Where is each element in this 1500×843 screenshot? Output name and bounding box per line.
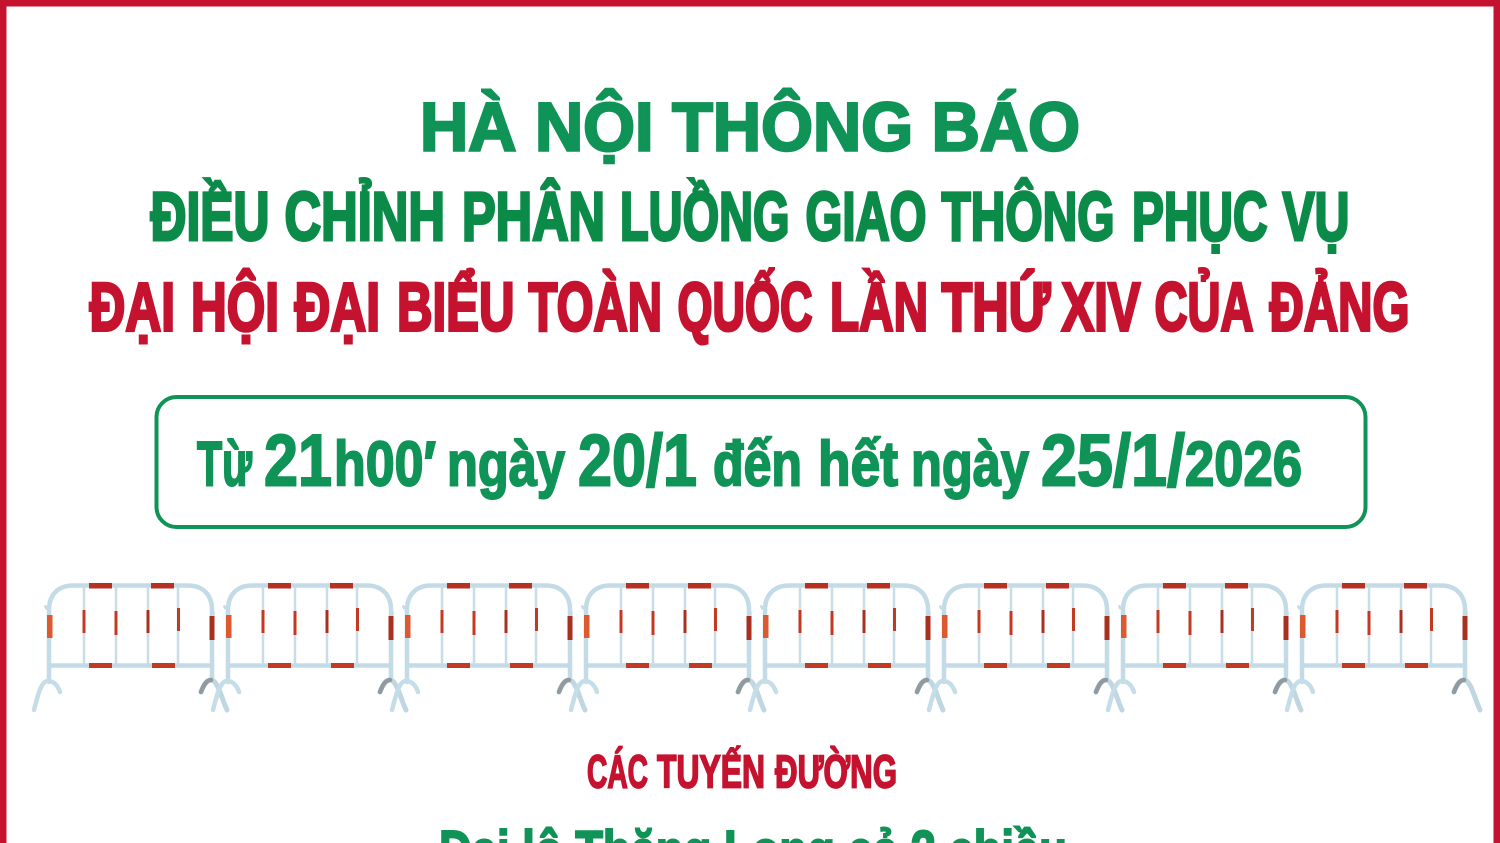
subtitle: traffic adjustment <box>150 178 1350 255</box>
subtitle: traffic adjustment: PHÂN <box>462 178 605 255</box>
barrier row <box>34 583 1480 710</box>
subtitle: party congress: CỦA <box>1154 268 1254 346</box>
subtitle: party congress: ĐẠI <box>294 268 380 346</box>
subtitle: traffic adjustment: PHỤC <box>1132 178 1268 255</box>
subtitle: traffic adjustment: ĐIỀU <box>150 178 270 255</box>
date text: ngày <box>911 430 1029 500</box>
section heading: routes: CÁC <box>587 746 648 798</box>
date text <box>197 420 1302 502</box>
date text: h00′ <box>334 430 436 500</box>
subtitle: party congress: LẦN <box>830 268 928 346</box>
subtitle: party congress: BIỂU <box>397 268 514 346</box>
subtitle: party congress <box>90 268 1410 346</box>
date text: 20/1 <box>578 420 697 502</box>
subtitle: traffic adjustment: VỤ <box>1282 178 1350 255</box>
section heading: routes: ĐƯỜNG <box>775 746 897 798</box>
subtitle: traffic adjustment: CHỈNH <box>284 178 445 255</box>
subtitle: traffic adjustment: GIAO <box>806 178 926 255</box>
date text: 25/1/ <box>1041 420 1185 502</box>
subtitle: party congress: TOÀN <box>528 268 662 346</box>
subtitle: party congress: HỘI <box>191 268 279 346</box>
date text: ngày <box>447 430 565 500</box>
date text: đến <box>713 430 802 500</box>
date text: hết <box>818 430 898 500</box>
subtitle: traffic adjustment: THÔNG <box>942 178 1114 255</box>
subtitle: party congress: QUỐC <box>678 268 812 346</box>
section heading: routes <box>587 746 897 798</box>
section heading: routes: TUYẾN <box>657 746 765 798</box>
date callout box <box>156 397 1366 527</box>
subtitle: party congress: XIV <box>1062 268 1141 346</box>
subtitle: party congress: THỨ <box>942 268 1051 346</box>
subtitle: party congress: ĐẢNG <box>1270 268 1410 346</box>
date text: Từ <box>197 430 252 500</box>
date text: 21 <box>264 420 332 502</box>
subtitle: traffic adjustment: LUỒNG <box>620 178 790 255</box>
title: Hà Nội thông báo: HÀ NỘI THÔNG BÁO <box>420 88 1080 166</box>
date text: 2026 <box>1185 430 1302 500</box>
subtitle: party congress: ĐẠI <box>90 268 175 346</box>
